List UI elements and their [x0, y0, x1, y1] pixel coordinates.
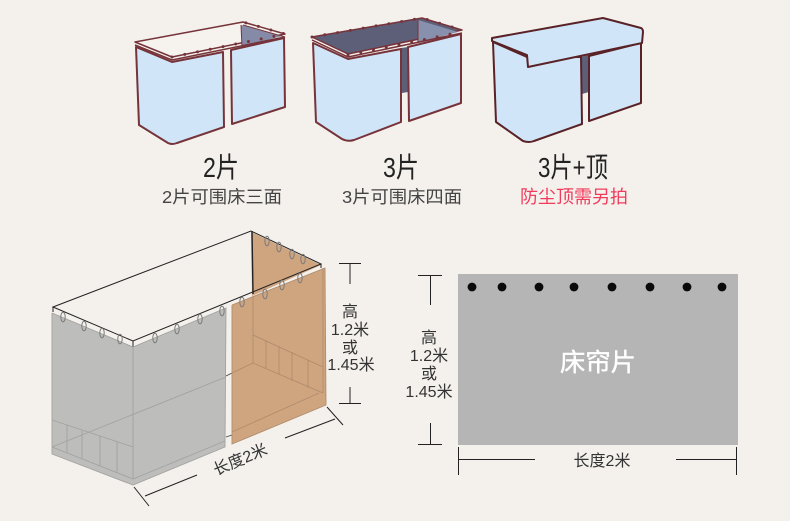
height dimension: left diagram — [327, 263, 375, 404]
top cover — [492, 18, 643, 67]
left panel — [136, 47, 224, 144]
gap behind panels — [581, 55, 589, 94]
grey panel — [52, 308, 226, 485]
top frame — [53, 231, 321, 347]
dark top frame — [312, 18, 462, 93]
label: 2片: 2片 — [203, 152, 239, 183]
eyelet holes — [468, 283, 726, 291]
length dimension: left diagram — [134, 407, 343, 506]
label: 3片: 3片 — [383, 152, 419, 183]
right panel — [408, 34, 461, 121]
right panel — [231, 38, 285, 124]
left panel — [313, 43, 401, 141]
height dimension: left diagram: 1.45米 — [327, 356, 375, 374]
label: 3片+顶: 3片+顶 — [538, 152, 608, 183]
diagram: 2 panel curtain — [135, 22, 285, 144]
curtain rings — [61, 236, 305, 344]
length dimension: flat sheet: 长度2米 — [574, 452, 630, 470]
caption: 防尘顶需另拍: 防尘顶需另拍 — [520, 187, 628, 207]
diagram: 3 panel curtain — [312, 18, 462, 141]
right panel — [589, 43, 641, 121]
hidden frame lines — [226, 373, 232, 437]
sheet label: 床帘片 — [560, 349, 636, 377]
height dimension: left diagram: 高 — [342, 303, 358, 321]
height dimension: left diagram: 1.2米 — [331, 321, 369, 339]
caption: 3片可围床四面: 3片可围床四面 — [342, 187, 462, 207]
height dimension: left diagram: 或 — [342, 339, 358, 357]
height dimension: flat sheet — [405, 275, 453, 444]
panel: flat curtain sheet — [458, 274, 738, 445]
diagram: isometric bed with curtain panels — [52, 231, 326, 485]
height dimension: flat sheet: 高 — [421, 329, 437, 347]
height dimension: flat sheet: 1.2米 — [410, 347, 448, 365]
height dimension: flat sheet: 1.45米 — [405, 383, 453, 401]
left panel — [493, 42, 582, 142]
diagram: 3 panels plus top — [492, 18, 643, 142]
back orange panel — [251, 232, 321, 296]
length dimension: flat sheet — [458, 447, 737, 475]
height dimension: flat sheet: 或 — [421, 365, 437, 383]
length dimension: left diagram: 长度2米 — [211, 441, 270, 479]
caption: 2片可围床三面: 2片可围床三面 — [162, 187, 282, 207]
open top frame — [135, 22, 285, 60]
orange panel — [232, 268, 326, 444]
